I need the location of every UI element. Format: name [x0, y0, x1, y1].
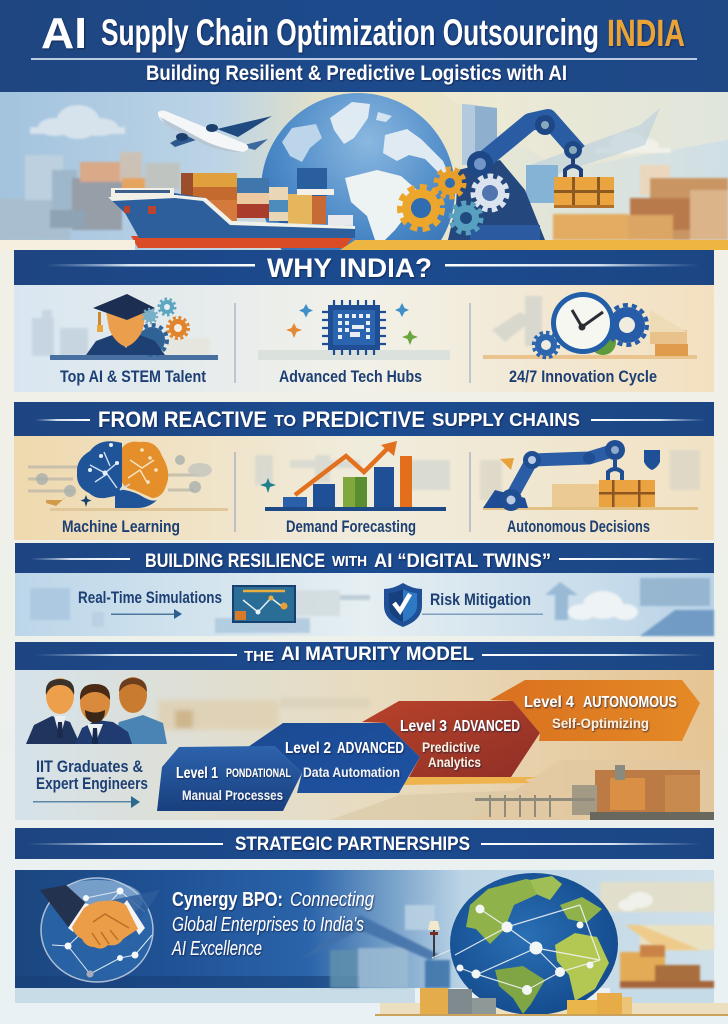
partnership text: Connecting: [290, 889, 374, 911]
card: top AI talent: Top AI & STEM Talent: [60, 367, 206, 386]
panel: predictive capabilities: [14, 436, 714, 540]
dock strip: [340, 240, 728, 250]
section: why india: [14, 250, 714, 392]
arrow: simulations: [111, 609, 182, 619]
icon: engineer team: [26, 677, 167, 744]
heading band: maturity model: THE: [244, 648, 274, 665]
section: reactive to predictive: [14, 402, 714, 540]
partnership text: Global Enterprises to India's: [172, 914, 364, 936]
label: IIT graduates: IIT Graduates &: [36, 758, 143, 776]
section: digital twins: [15, 543, 714, 636]
panel: partnership banner: [15, 870, 728, 1016]
level 4 chevron: Level 4: [524, 694, 574, 711]
level 1 chevron: Level 1: [176, 765, 218, 782]
card: innovation cycle: 24/7 Innovation Cycle: [509, 367, 657, 386]
level 1 chevron: Manual Processes: [182, 787, 283, 803]
hero illustration: global logistics: [0, 92, 728, 287]
heading band: from reactive to predictive: FROM REACTIVE: [98, 407, 267, 432]
card: innovation cycle: [483, 292, 697, 386]
heading band: digital twins: BUILDING RESILIENCE: [145, 551, 325, 572]
heading band: digital twins: [15, 543, 714, 573]
level 1 chevron: [157, 746, 302, 811]
cloud right: [618, 892, 653, 911]
clouds left: [30, 105, 125, 139]
title: INDIA: [607, 13, 685, 55]
robotic arm: [448, 115, 582, 240]
suspended crate: [554, 177, 614, 208]
card: advanced tech hubs: [258, 300, 450, 386]
panel: digital twins: [15, 573, 714, 636]
heading band: from reactive to predictive: PREDICTIVE: [302, 407, 425, 432]
panel: why india: [14, 285, 714, 392]
card: machine learning: [28, 441, 228, 536]
airplane: [158, 110, 272, 152]
world globe with network: [450, 873, 618, 1015]
level 2 chevron: [248, 723, 420, 793]
city blocks left: [0, 152, 180, 240]
cloud: [568, 591, 638, 620]
stacked boxes right: [620, 925, 714, 988]
heading band: why india: [14, 250, 714, 285]
heading band: partnerships: STRATEGIC PARTNERSHIPS: [235, 834, 470, 855]
level 4 chevron: Self-Optimizing: [552, 715, 649, 731]
level 3 chevron: [362, 701, 540, 777]
subtitle: Building Resilient & Predictive Logistics with AI: [146, 62, 567, 85]
card: demand forecasting chart: [255, 441, 450, 536]
title: AI: [41, 9, 87, 58]
clouds right: [596, 132, 671, 154]
containers on ship: [181, 173, 353, 227]
level 4 chevron: AUTONOMOUS: [583, 694, 677, 711]
panel: maturity model: [15, 670, 714, 820]
level 2 chevron: Data Automation: [303, 764, 400, 780]
card: autonomous decisions robot: Autonomous Decisions: [507, 518, 650, 536]
level 2 chevron: Level 2: [285, 740, 331, 757]
card: machine learning: Machine Learning: [62, 517, 180, 536]
foreground boxes: [375, 988, 728, 1016]
partnership text: Cynergy BPO:: [172, 889, 283, 911]
section: strategic partnerships: [15, 828, 728, 1016]
cargo ship: [108, 188, 355, 248]
level 3 chevron: Level 3: [400, 718, 447, 735]
card: demand forecasting chart: Demand Forecasting: [286, 517, 416, 536]
icon: shield: [384, 583, 422, 627]
label: IIT graduates: Expert Engineers: [36, 775, 148, 793]
building right: [462, 104, 558, 203]
heading band: from reactive to predictive: [14, 402, 714, 436]
label: risk mitigation: Risk Mitigation: [430, 591, 531, 609]
level 3 chevron: ADVANCED: [453, 718, 520, 735]
header banner: [0, 0, 728, 92]
arrow: to maturity levels: [33, 796, 140, 808]
heading band: digital twins: AI “DIGITAL TWINS”: [374, 551, 551, 572]
partnership text: [171, 889, 374, 960]
label: IIT graduates: [36, 758, 148, 793]
label: real-time simulations: Real-Time Simulations: [78, 589, 222, 607]
heading band: from reactive to predictive: TO: [274, 413, 296, 430]
heading band: why india: WHY INDIA?: [267, 253, 432, 283]
level 3 chevron: Predictive: [422, 739, 480, 755]
heading band: partnerships: [15, 828, 714, 859]
card: advanced tech hubs: Advanced Tech Hubs: [279, 367, 422, 386]
level 4 chevron: [490, 680, 700, 741]
network globe and handshake: [40, 878, 160, 982]
gears: [400, 169, 507, 233]
card: top AI talent: [32, 294, 218, 386]
street lamp: [428, 921, 455, 958]
level 1 chevron: PONDATIONAL: [226, 766, 291, 780]
heading band: digital twins: WITH: [332, 553, 367, 570]
handshake: [40, 885, 160, 949]
level 3 chevron: Analytics: [428, 754, 481, 770]
faded factory: [330, 760, 714, 820]
heading band: maturity model: [15, 642, 714, 670]
heading band: from reactive to predictive: SUPPLY CHAINS: [432, 410, 580, 430]
heading band: maturity model: AI MATURITY MODEL: [281, 644, 474, 665]
level 2 chevron: ADVANCED: [337, 740, 404, 757]
partnership text: AI Excellence: [171, 938, 262, 960]
icon: simulation screen: [232, 585, 296, 623]
stacked cargo right: [553, 165, 728, 240]
card: autonomous decisions robot: [480, 440, 700, 536]
section: AI maturity model: [15, 642, 714, 820]
globe: [261, 93, 455, 287]
